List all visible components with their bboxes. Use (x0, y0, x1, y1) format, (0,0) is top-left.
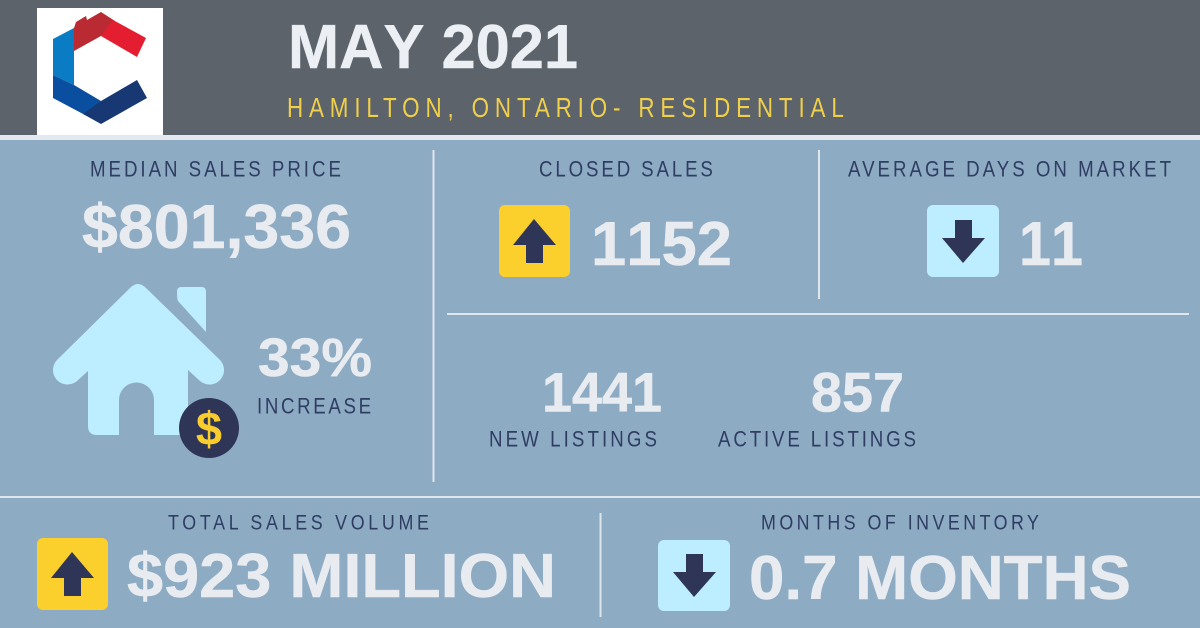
label: average days on market: AVERAGE DAYS ON MARKET (848, 158, 1171, 182)
value: new listings: 1441 (542, 360, 662, 424)
label: months of inventory: MONTHS OF INVENTORY (761, 511, 1039, 535)
subtitle: HAMILTON, ONTARIO- RESIDENTIAL (287, 93, 844, 124)
label: new listings: NEW LISTINGS (489, 428, 657, 452)
icon: house with dollar badge (53, 284, 239, 458)
label: closed sales: CLOSED SALES (539, 158, 713, 182)
label: active listings: ACTIVE LISTINGS (718, 428, 916, 452)
panel: average days on market (848, 158, 1171, 279)
header band (0, 0, 1200, 140)
value: median sales price: $801,336 (82, 193, 351, 262)
icon: down arrow (658, 540, 730, 611)
icon: down arrow (927, 205, 999, 277)
icon: house with dollar badge: $ (196, 402, 222, 455)
panel: new listings (489, 360, 662, 452)
icon: up arrow (37, 538, 108, 610)
panel: months of inventory (658, 511, 1131, 613)
panel: median sales price (53, 158, 372, 458)
label: median sales price: MEDIAN SALES PRICE (90, 158, 341, 182)
icon: up arrow (499, 205, 570, 277)
dividers (0, 150, 1200, 617)
value: closed sales: 1152 (591, 210, 732, 279)
panel: closed sales (499, 158, 732, 279)
value: total sales volume: $923 MILLION (127, 542, 556, 611)
value: days on market: 11 (1019, 210, 1083, 279)
title: MAY 2021 (288, 13, 578, 82)
value: percent increase: 33% (258, 328, 372, 388)
panel: active listings (718, 360, 916, 452)
panel: total sales volume (37, 511, 556, 611)
label: total sales volume: TOTAL SALES VOLUME (168, 511, 429, 535)
logo (37, 8, 163, 135)
value: active listings: 857 (811, 360, 904, 424)
label: increase: INCREASE (257, 395, 371, 419)
value: months of inventory: 0.7 MONTHS (749, 544, 1131, 613)
